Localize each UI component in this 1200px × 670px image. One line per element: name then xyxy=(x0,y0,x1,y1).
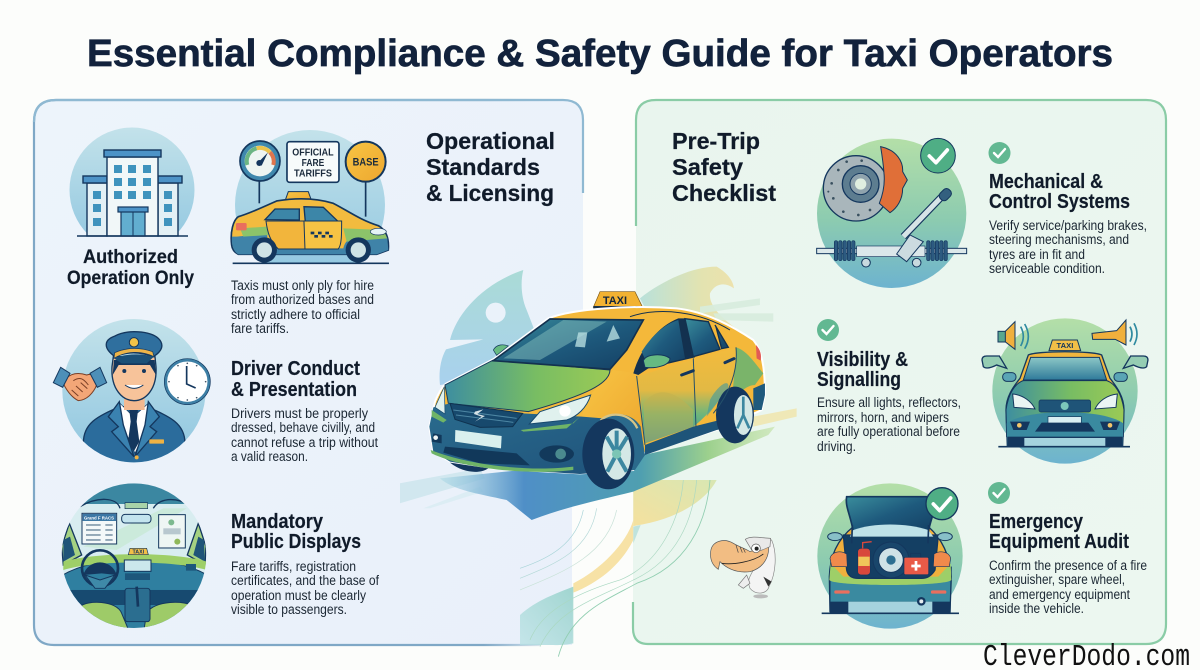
text: visibility checks: mirrors, horn, and wipers xyxy=(817,410,949,425)
text: mechanical checks: steering mechanisms, and xyxy=(989,232,1129,247)
heading: operational standards and licensing xyxy=(426,128,555,206)
text: driver conduct rules: Drivers must be properly xyxy=(231,406,368,421)
icon: taxi front with speaker and horn: TAXI xyxy=(1057,341,1073,350)
heading: visibility and signalling xyxy=(817,349,908,391)
text: authorized bases and tariffs: Taxis must only ply for hire xyxy=(231,278,374,293)
text: visibility checks: Ensure all lights, reflectors, xyxy=(817,395,961,410)
text: emergency checks: extinguisher, spare wheel, xyxy=(989,572,1125,587)
icon: taxi dashboard interior: TAXI xyxy=(132,550,145,556)
taxi roof sign: TAXI xyxy=(603,295,627,307)
heading: mechanical and control systems: Control Systems xyxy=(989,191,1130,213)
label: authorized operation only xyxy=(67,246,194,289)
heading: mandatory public displays xyxy=(231,511,361,553)
heading: pre-trip safety checklist: Pre-Trip xyxy=(672,128,760,154)
label: authorized operation only: Operation Only xyxy=(67,267,194,289)
icon: check badge mechanical xyxy=(988,142,1010,164)
heading: visibility and signalling: Signalling xyxy=(817,369,901,391)
taxi roof sign xyxy=(593,292,643,309)
text: authorized bases and tariffs: fare tariffs. xyxy=(231,321,289,336)
icon: taxi dashboard interior xyxy=(60,483,210,633)
icon: taxi with meter, fare sign and base sign: TARIFFS xyxy=(294,169,332,180)
text: visibility checks: are fully operational before xyxy=(817,424,960,439)
heading: operational standards and licensing: & Licensing xyxy=(426,180,554,206)
text: driver conduct rules: a valid reason. xyxy=(231,449,308,464)
icon: taxi with meter, fare sign and base sign: OFFICIAL xyxy=(292,147,334,158)
decoration: swooshes and road behind the car xyxy=(400,267,797,657)
icon: brake disc and steering rack xyxy=(817,138,967,288)
heading: operational standards and licensing: Standards xyxy=(426,154,540,180)
label: authorized operation only: Authorized xyxy=(83,246,178,268)
text: mandatory displays rules xyxy=(231,559,379,617)
text: driver conduct rules: dressed, behave civilly, and xyxy=(231,420,375,435)
text: mandatory displays rules: operation must be clearly xyxy=(231,588,366,603)
text: mandatory displays rules: visible to passengers. xyxy=(231,602,347,617)
icon: uniformed driver with handshake and clock xyxy=(53,319,210,467)
text: driver conduct rules: cannot refuse a trip without xyxy=(231,435,378,450)
text: emergency checks: Confirm the presence of a fire xyxy=(989,558,1147,573)
title: Essential Compliance & Safety Guide for Taxi Operators xyxy=(87,33,1113,75)
illustration: dodo mascot xyxy=(711,537,775,598)
text: authorized bases and tariffs: strictly adhere to official xyxy=(231,307,360,322)
text: mechanical checks xyxy=(989,218,1147,276)
heading: operational standards and licensing: Operational xyxy=(426,128,555,154)
text: emergency checks: and emergency equipment xyxy=(989,587,1130,602)
text: mechanical checks: tyres are in fit and xyxy=(989,247,1085,262)
heading: mechanical and control systems xyxy=(989,171,1130,213)
heading: mechanical and control systems: Mechanical & xyxy=(989,171,1103,193)
panel: operational standards and licensing xyxy=(34,100,583,645)
text: emergency checks: inside the vehicle. xyxy=(989,601,1084,616)
icon: taxi dashboard interior: Grand F RACS xyxy=(84,515,114,520)
text: mandatory displays rules: certificates, and the base of xyxy=(231,573,379,588)
heading: mandatory public displays: Mandatory xyxy=(231,511,324,533)
text: visibility checks xyxy=(817,395,961,454)
text: mandatory displays rules: Fare tariffs, registration xyxy=(231,559,356,574)
heading: pre-trip safety checklist: Checklist xyxy=(672,180,776,206)
icon: taxi front with speaker and horn xyxy=(982,318,1148,464)
heading: emergency equipment audit xyxy=(989,511,1129,553)
illustration: central taxi xyxy=(429,292,765,489)
text: authorized bases and tariffs: from authorized bases and xyxy=(231,292,374,307)
panel: pre-trip safety checklist xyxy=(633,100,1166,644)
heading: driver conduct and presentation xyxy=(231,358,360,401)
heading: pre-trip safety checklist: Safety xyxy=(672,154,743,180)
heading: driver conduct and presentation: & Presentation xyxy=(231,379,357,401)
icon: open trunk with emergency equipment xyxy=(817,483,963,629)
icon: taxi with meter, fare sign and base sign: FARE xyxy=(302,158,325,169)
text: visibility checks: driving. xyxy=(817,439,856,454)
text: mechanical checks: serviceable condition. xyxy=(989,261,1105,276)
icon: check badge emergency xyxy=(988,482,1010,504)
text: mechanical checks: Verify service/parking brakes, xyxy=(989,218,1147,233)
heading: pre-trip safety checklist xyxy=(672,128,776,206)
icon: check badge visibility xyxy=(817,319,839,341)
icon: taxi with meter, fare sign and base sign: BASE xyxy=(353,157,379,169)
text: emergency checks xyxy=(989,558,1147,616)
icon: taxi with meter, fare sign and base sign xyxy=(231,130,389,280)
heading: mandatory public displays: Public Displays xyxy=(231,531,361,553)
heading: emergency equipment audit: Emergency xyxy=(989,511,1084,533)
heading: emergency equipment audit: Equipment Audit xyxy=(989,531,1129,553)
text: authorized bases and tariffs xyxy=(231,278,374,336)
text: driver conduct rules xyxy=(231,406,378,464)
heading: visibility and signalling: Visibility & xyxy=(817,349,908,371)
heading: driver conduct and presentation: Driver Conduct xyxy=(231,358,360,380)
icon: office building xyxy=(70,128,194,237)
